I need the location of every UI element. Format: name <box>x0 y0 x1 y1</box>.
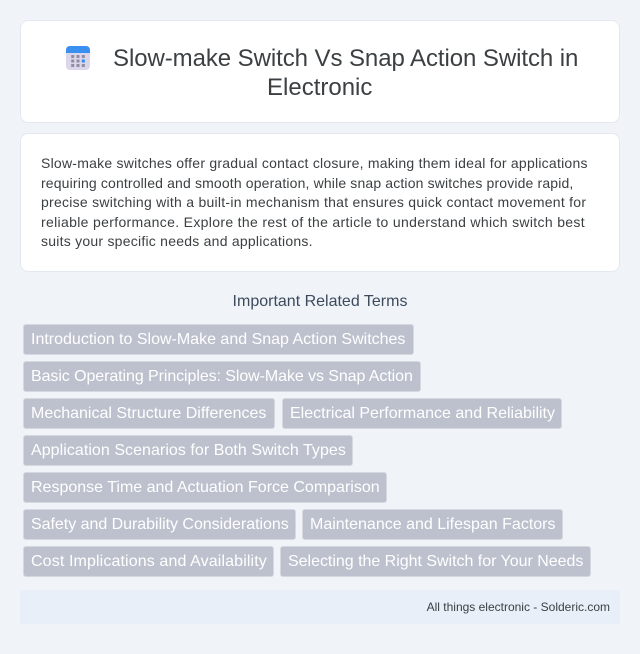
tag <box>280 546 591 577</box>
title: Electronic <box>267 74 372 101</box>
tag: Cost Implications and Availability <box>31 553 267 570</box>
title: Slow-make Switch Vs Snap Action Switch in <box>113 45 578 72</box>
tag <box>23 546 274 577</box>
panel: intro card <box>20 133 620 272</box>
panel: term tags <box>23 324 591 577</box>
tag: Application Scenarios for Both Switch Types <box>31 442 346 459</box>
tag: Selecting the Right Switch for Your Needs <box>288 553 583 570</box>
tag: Safety and Durability Considerations <box>31 516 289 533</box>
footer bar: All things electronic - Solderic.com <box>427 600 610 614</box>
tag <box>282 398 562 429</box>
tag: Maintenance and Lifespan Factors <box>310 516 555 533</box>
heading: important related terms: Important Related Terms <box>233 293 407 310</box>
tag <box>23 361 421 392</box>
intro paragraph: suits your specific needs and applications. <box>41 233 313 249</box>
panel: title card <box>20 20 620 123</box>
intro paragraph: precise switching with a built-in mechanism that ensures quick contact movement for <box>41 194 586 210</box>
tag: Mechanical Structure Differences <box>31 405 266 422</box>
tag: Response Time and Actuation Force Comparison <box>31 479 380 496</box>
intro paragraph: requiring controlled and smooth operation, while snap action switches provide rapid, <box>41 175 573 191</box>
icon: calendar grid <box>66 46 90 70</box>
intro paragraph: Slow-make switches offer gradual contact closure, making them ideal for applications <box>41 155 588 171</box>
tag <box>23 472 387 503</box>
tag <box>23 435 353 466</box>
title <box>113 45 578 101</box>
intro paragraph: reliable performance. Explore the rest of the article to understand which switch best <box>41 214 585 230</box>
tag <box>23 324 414 355</box>
tag <box>23 509 296 540</box>
tag: Basic Operating Principles: Slow-Make vs Snap Action <box>31 368 413 385</box>
tag: Electrical Performance and Reliability <box>290 405 555 422</box>
intro paragraph <box>41 155 588 249</box>
tag: Introduction to Slow-Make and Snap Action Switches <box>31 331 405 348</box>
tag <box>302 509 563 540</box>
tag <box>23 398 275 429</box>
footer bar <box>20 590 620 624</box>
